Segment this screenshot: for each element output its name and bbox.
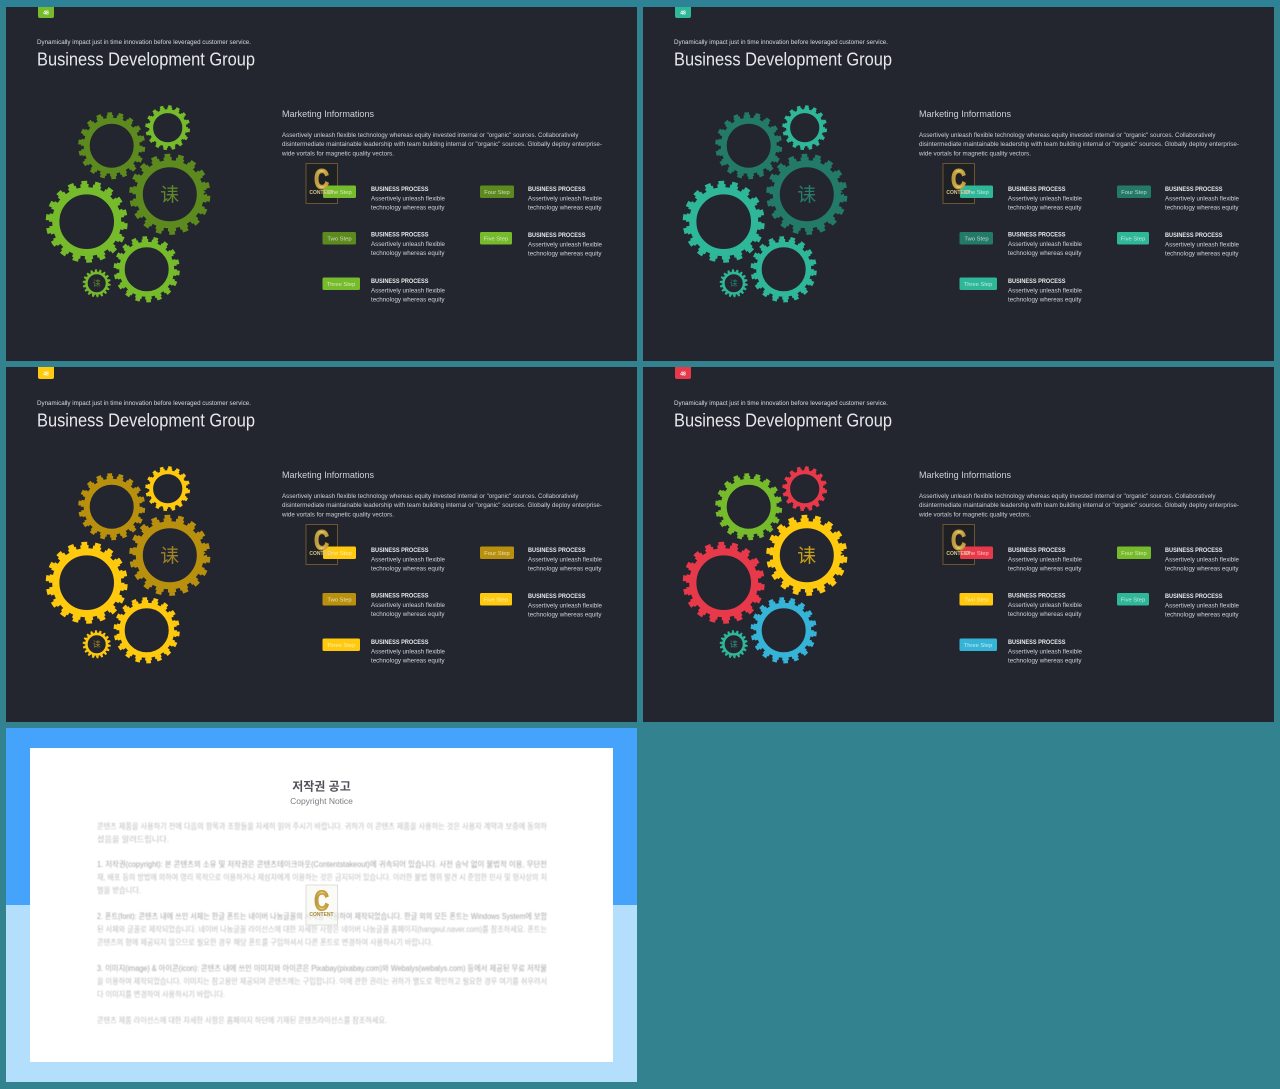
page tag: 48 [680,10,686,16]
notice body: 된 서체와 글꼴로 제작되었습니다. 네이버 나눔글꼴 라이선스에 대한 자세한 사항은 네이버 나눔글꼴 홈페이지(hangeul.naver.com)를 참조하세요. 폰트는 [97,924,547,934]
paragraph: disintermediate maintainable leadership with team building internal or "organic" sources. Globally deploy enterprise- [282,503,602,509]
step: one [323,546,356,559]
process text blocks: Assertively unleash flexible [1008,196,1083,202]
page tag: 48 [680,372,686,378]
process text blocks: Assertively unleash flexible [371,650,446,656]
gear: large left [684,544,763,622]
logo frame [943,164,974,204]
process text blocks: Assertively unleash flexible [371,242,446,248]
paragraph: Assertively unleash flexible technology whereas equity invested internal or "organic" sources. Collaboratively [919,133,1216,139]
gears illustration [684,106,846,301]
process text blocks: Assertively unleash flexible [371,603,446,609]
logo mark [946,164,971,196]
step: two: Two Step [964,597,989,603]
logo mark: C [314,164,329,195]
gear: top left [80,114,144,178]
subtitle: Dynamically impact just in time innovation before leveraged customer service. [674,400,888,407]
process text blocks: technology whereas equity [1008,566,1082,572]
logo frame [943,524,974,564]
process text blocks: technology whereas equity [1008,658,1082,664]
gear: center with glyph: 诔 [797,184,816,206]
logo mark: CONTENT [946,551,971,557]
process text blocks: technology whereas equity [371,658,444,664]
heading: marketing informations: Marketing Informations [282,109,374,119]
process text blocks: BUSINESS PROCESS [528,548,586,554]
step: five [480,232,512,244]
gears illustration [47,468,209,662]
gear: center with glyph [768,156,846,233]
step: three: Three Step [964,643,992,649]
process text blocks [371,548,603,664]
process text blocks: BUSINESS PROCESS [371,232,428,238]
paragraph: disintermediate maintainable leadership with team building internal or "organic" sources. Globally deploy enterprise- [919,503,1239,509]
logo mark: CONTENT [309,551,334,557]
gear: tiny with glyph [720,270,747,296]
process text blocks: BUSINESS PROCESS [1165,594,1222,600]
process text blocks: technology whereas equity [1165,206,1238,212]
paragraph: Assertively unleash flexible technology whereas equity invested internal or "organic" sources. Collaboratively [282,133,578,139]
logo mark [309,525,334,557]
gear: center with glyph [131,156,209,233]
process text blocks: technology whereas equity [528,252,602,258]
panel: teal gears slide [643,7,1274,361]
process text blocks: Assertively unleash flexible [1165,196,1240,202]
process text blocks: technology whereas equity [1165,252,1238,258]
logo mark [309,164,334,196]
notice body: 다 이미지를 변경하여 사용하시기 바랍니다. [97,989,225,999]
notice title: 저작권 공고 [292,778,351,794]
step: five [1117,232,1149,244]
gear: center with glyph: 诔 [160,184,179,206]
gear: tiny with glyph: 诔 [93,640,101,649]
page tag [38,367,54,379]
gear: lower right [115,238,178,301]
paragraph: wide vortals for magnetic quality vectors. [281,512,394,518]
step: two [960,593,993,606]
process text blocks: technology whereas equity [1008,251,1082,257]
process text blocks: Assertively unleash flexible [1008,603,1083,609]
step: two [960,232,993,244]
step: three: Three Step [327,643,355,649]
step: four [1117,546,1151,559]
logo watermark: C [314,886,329,917]
paragraph: disintermediate maintainable leadership with team building internal or "organic" sources. Globally deploy enterprise- [919,142,1239,148]
process text blocks: technology whereas equity [371,298,444,304]
process text blocks: Assertively unleash flexible [1008,557,1083,563]
process text blocks [371,187,603,304]
step: one: One Step [327,190,352,196]
process text blocks: Assertively unleash flexible [371,288,446,294]
paragraph [918,494,1239,518]
process text blocks: BUSINESS PROCESS [371,640,428,646]
step: three [322,278,360,290]
process text blocks: BUSINESS PROCESS [371,187,428,193]
process text blocks: Assertively unleash flexible [528,557,603,563]
notice body: 3. 이미지(image) & 아이콘(icon): 콘텐츠 내에 쓰인 이미지와 아이콘은 Pixabay(pixabay.com)와 Webalys(webalys.com) 등에서 제공된 무료 저작물 [97,963,547,973]
notice body: 콘텐츠 제품을 사용하기 전에 다음의 항목과 조항들을 자세히 읽어 주시기 바랍니다. 귀하가 이 콘텐츠 제품을 사용하는 것은 사용자 계약과 보증에 동의하 [97,821,548,831]
step: one: One Step [327,551,352,557]
process text blocks: technology whereas equity [371,612,444,618]
paragraph [281,133,602,158]
logo mark: C [314,525,329,556]
gear: top right [784,106,826,149]
paragraph: Assertively unleash flexible technology whereas equity invested internal or "organic" sources. Collaboratively [282,494,578,500]
step: five: Five Step [1121,597,1145,603]
panel: green gears slide [6,7,637,361]
process text blocks: BUSINESS PROCESS [371,548,428,554]
step: three: Three Step [327,282,355,288]
paragraph: wide vortals for magnetic quality vectors. [918,152,1031,158]
step: four [480,546,514,559]
process text blocks: Assertively unleash flexible [528,242,603,248]
process text blocks: BUSINESS PROCESS [1165,187,1222,193]
notice body: 콘텐츠 제품 라이선스에 대한 자세한 사항은 홈페이지 하단에 기재된 콘텐츠라이선스를 참조하세요. [97,1015,387,1025]
gear: top left [80,475,144,539]
gear: top right [146,468,189,510]
title: Business Development Group [674,410,892,430]
panel: yellow gears slide [6,367,637,722]
logo frame [306,524,338,564]
process text blocks: BUSINESS PROCESS [1008,594,1066,600]
process text blocks: technology whereas equity [1165,613,1238,619]
process text blocks: technology whereas equity [1008,612,1082,618]
gear: top left [717,475,781,539]
page tag: 48 [43,10,49,16]
process text blocks [1008,187,1240,304]
panel: copyright notice [6,728,637,1082]
process text blocks: technology whereas equity [1165,566,1238,572]
logo watermark: CONTENT [309,912,334,918]
gear: tiny with glyph [720,631,747,658]
step: one [960,186,993,198]
heading: marketing informations: Marketing Informations [282,470,374,480]
process text blocks: technology whereas equity [528,566,602,572]
step: two [322,593,356,606]
gear: top right [146,106,189,149]
step: five [480,593,512,606]
logo watermark [306,885,338,925]
paragraph [918,133,1239,158]
page tag: 48 [43,372,49,378]
paragraph: Assertively unleash flexible technology whereas equity invested internal or "organic" sources. Collaboratively [919,494,1216,500]
gear: center with glyph [131,516,209,594]
gear: center with glyph: 诔 [797,545,816,567]
notice body: 벌을 받습니다. [97,885,141,895]
gears illustration [47,106,209,301]
process text blocks: Assertively unleash flexible [528,196,603,202]
gear: top left [717,114,781,178]
step: four: Four Step [1121,551,1147,557]
process text blocks: BUSINESS PROCESS [528,233,586,239]
step: three [960,278,997,290]
step: three [960,638,997,651]
process text blocks [1008,548,1240,664]
process text blocks: BUSINESS PROCESS [1008,640,1066,646]
step: two: Two Step [327,597,352,603]
title: Business Development Group [37,50,255,70]
gear: tiny with glyph: 诔 [730,640,738,649]
paragraph: disintermediate maintainable leadership with team building internal or "organic" sources. Globally deploy enterprise- [282,142,602,148]
logo frame [306,164,338,204]
step: two [322,232,356,244]
process text blocks: BUSINESS PROCESS [1165,233,1222,239]
process text blocks: Assertively unleash flexible [1165,242,1240,248]
process text blocks: BUSINESS PROCESS [1165,548,1222,554]
notice body: 재, 배포 등의 방법에 의하여 영리 목적으로 이용하거나 제삼자에게 이용하는 것은 금지되어 있습니다. 이러한 불법 행위 발견 시 준엄한 민사 및 형사상의 처 [97,872,547,882]
logo mark: CONTENT [309,190,334,196]
step: three [322,638,360,651]
notice subtitle: Copyright Notice [290,796,353,806]
notice body: 셨음을 알려드립니다. [97,834,169,844]
step: one [323,186,356,198]
gear: lower right [115,599,178,662]
gear: lower right [752,238,815,301]
step: five: Five Step [484,597,508,603]
gear: large left [47,544,126,622]
logo mark [946,525,971,557]
panel: multicolour gears slide [643,367,1274,722]
notice body: 2. 폰트(font): 콘텐츠 내에 쓰인 서체는 한글 폰트는 네이버 나눔글꼴의 서체를 사용하여 제작되었습니다. 한글 외의 모든 폰트는 Windows System에 보함 [97,911,548,921]
process text blocks: Assertively unleash flexible [1008,288,1083,294]
process text blocks: Assertively unleash flexible [1008,650,1083,656]
heading: marketing informations: Marketing Informations [919,109,1011,119]
subtitle: Dynamically impact just in time innovation before leveraged customer service. [37,39,251,46]
process text blocks: technology whereas equity [1008,206,1082,212]
process text blocks: BUSINESS PROCESS [1008,187,1066,193]
process text blocks: Assertively unleash flexible [371,196,446,202]
step: five [1117,593,1149,606]
notice body [97,821,548,1025]
process text blocks: Assertively unleash flexible [371,557,446,563]
process text blocks: BUSINESS PROCESS [371,594,428,600]
gear: large left [684,182,763,261]
process text blocks: Assertively unleash flexible [1008,242,1083,248]
heading: marketing informations: Marketing Informations [919,470,1011,480]
gear: top right [784,468,826,510]
logo mark: C [951,164,966,195]
gear: tiny with glyph [84,631,110,658]
paragraph: wide vortals for magnetic quality vectors. [281,152,394,158]
step: one: One Step [964,551,989,557]
process text blocks: technology whereas equity [528,206,602,212]
step: one: One Step [964,190,989,196]
process text blocks: technology whereas equity [371,206,444,212]
logo mark: CONTENT [946,190,971,196]
notice body: 1. 저작권(copyright): 본 콘텐츠의 소유 및 저작권은 콘텐츠테이크아웃(Contentstakeout)에 귀속되어 있습니다. 사전 승낙 없이 불법적 이용, 무단전 [97,859,547,869]
step: five: Five Step [484,236,508,242]
process text blocks: technology whereas equity [528,613,602,619]
paragraph [281,494,602,518]
step: three: Three Step [964,282,992,288]
page tag [675,367,691,379]
step: one [960,546,993,559]
process text blocks: Assertively unleash flexible [1165,604,1240,610]
notice body: 을 이용하여 제작되었습니다. 이미지는 참고용만 제공되며 콘텐츠에는 구입합니다. 이에 관한 권리는 귀하가 별도로 확인하고 필요한 경우 여기를 쉬우려서 [97,976,547,986]
page tag [38,7,54,18]
title: Business Development Group [37,410,255,430]
step: four [1117,186,1151,198]
page tag [675,7,691,18]
subtitle: Dynamically impact just in time innovation before leveraged customer service. [674,39,888,46]
step: two: Two Step [964,236,989,242]
step: four: Four Step [484,551,510,557]
process text blocks: BUSINESS PROCESS [528,594,586,600]
gear: tiny with glyph: 诔 [730,279,738,288]
notice body: 콘텐츠의 형에 제공되지 않으므로 필요한 경우 해당 폰트를 구입하셔서 다른 폰트로 변경하여 사용하시기 바랍니다. [97,937,433,947]
logo mark: C [951,525,966,556]
process text blocks: BUSINESS PROCESS [1008,279,1066,285]
process text blocks: BUSINESS PROCESS [528,187,586,193]
process text blocks: Assertively unleash flexible [528,604,603,610]
process text blocks: BUSINESS PROCESS [1008,232,1066,238]
gears illustration [684,468,846,662]
gear: tiny with glyph: 诔 [93,279,101,288]
process text blocks: technology whereas equity [371,251,444,257]
process text blocks: technology whereas equity [1008,298,1082,304]
paragraph: wide vortals for magnetic quality vectors. [918,512,1031,518]
step: four: Four Step [484,190,510,196]
process text blocks: Assertively unleash flexible [1165,557,1240,563]
subtitle: Dynamically impact just in time innovation before leveraged customer service. [37,400,251,407]
gear: center with glyph: 诔 [160,545,179,567]
step: two: Two Step [327,236,352,242]
gear: large left [47,182,126,261]
process text blocks: BUSINESS PROCESS [1008,548,1066,554]
process text blocks: technology whereas equity [371,566,444,572]
gear: tiny with glyph [84,270,110,296]
gear: lower right [752,599,815,662]
step: four [480,186,514,198]
process text blocks: BUSINESS PROCESS [371,279,428,285]
title: Business Development Group [674,50,892,70]
step: five: Five Step [1121,236,1145,242]
step: four: Four Step [1121,190,1147,196]
gear: center with glyph [768,516,846,594]
